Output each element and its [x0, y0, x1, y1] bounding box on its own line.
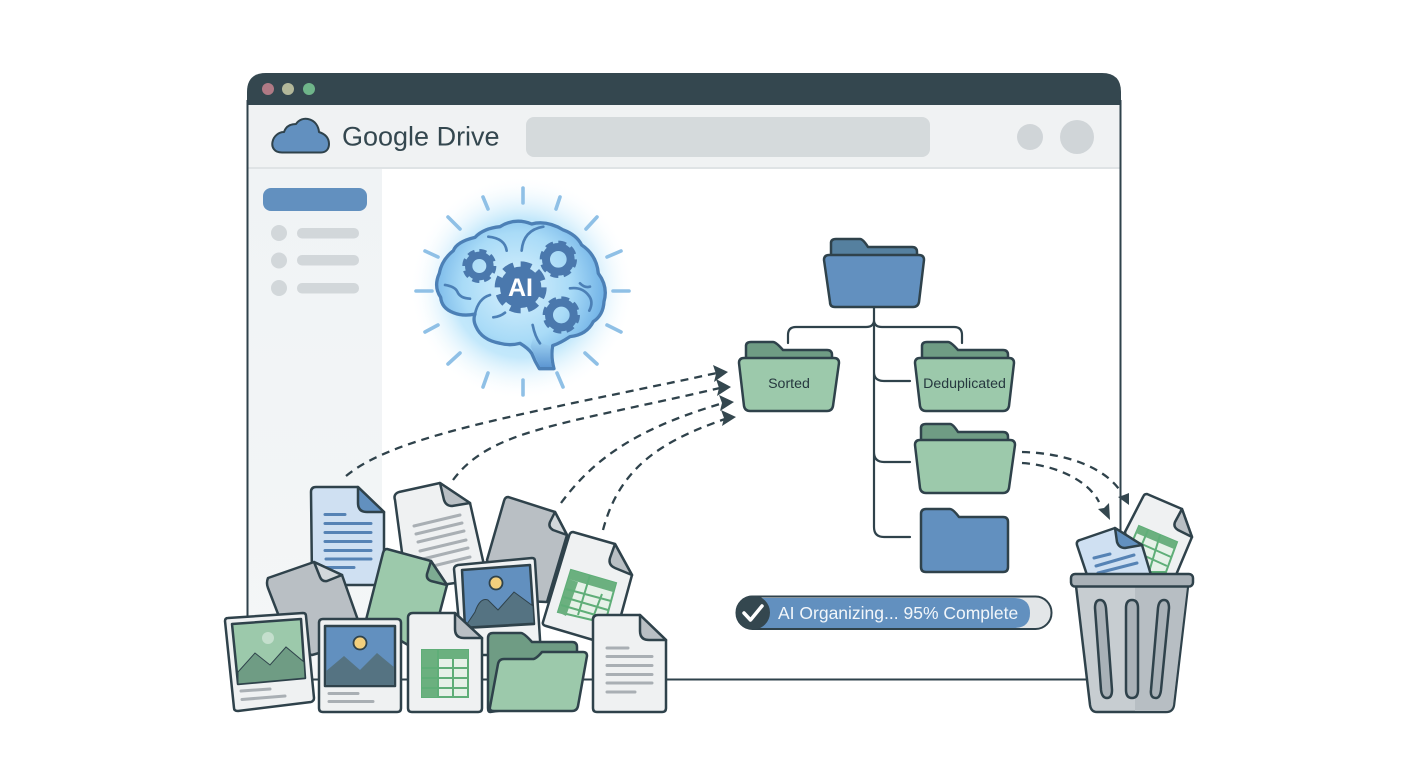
sidebar item 3	[271, 280, 359, 296]
title bar	[247, 73, 1121, 105]
progress label: AI Organizing... 95% Complete	[778, 603, 1018, 623]
header bar	[248, 105, 1120, 169]
document: gray front	[267, 562, 365, 655]
document: gray back	[487, 497, 567, 602]
root folder	[824, 239, 924, 307]
close dot	[262, 83, 274, 95]
brand name: Google Drive	[342, 122, 500, 152]
folder: unlabeled green	[915, 424, 1015, 493]
gear 1	[465, 252, 494, 280]
photo: green	[225, 613, 314, 711]
minimize dot	[282, 83, 294, 95]
slots	[1095, 600, 1112, 698]
progress bar	[736, 596, 1052, 630]
table	[558, 570, 616, 623]
sidebar item 2	[271, 252, 359, 268]
document: green	[366, 549, 447, 650]
AI gear	[498, 265, 543, 310]
folder tree connectors	[788, 307, 962, 537]
folder: Deduplicated	[915, 342, 1014, 411]
arrowheads	[713, 365, 736, 426]
dashed arrows to sorted folder	[346, 365, 736, 530]
folder: green open	[488, 633, 587, 712]
document: spreadsheet tilted	[543, 532, 632, 642]
document: blue	[311, 487, 384, 585]
brain outline	[437, 221, 605, 369]
AI brain	[410, 176, 634, 400]
check badge	[736, 596, 770, 630]
folder: Sorted	[739, 342, 839, 411]
sidebar item 1	[271, 225, 359, 241]
sun	[262, 632, 274, 644]
gear 2	[543, 244, 574, 275]
dashed arrows to trash	[1022, 452, 1129, 520]
glow	[410, 176, 634, 400]
label: Sorted	[768, 376, 810, 392]
trashed blue document	[1077, 528, 1151, 575]
sun	[490, 576, 502, 590]
can body	[1076, 586, 1188, 712]
label: Deduplicated	[923, 376, 1006, 392]
document: spreadsheet	[408, 613, 482, 712]
icon: cloud	[272, 119, 329, 152]
sun	[354, 636, 366, 650]
trashed spreadsheet	[1125, 494, 1192, 575]
sidebar	[248, 169, 382, 679]
table	[422, 650, 468, 697]
document: white tilted	[394, 483, 484, 590]
document: white	[593, 615, 666, 712]
browser window	[247, 73, 1121, 680]
sidebar button	[263, 188, 367, 211]
search bar	[526, 117, 930, 157]
settings button	[1017, 124, 1043, 150]
trash can	[1071, 494, 1193, 712]
AI label: AI	[508, 274, 533, 302]
can rim	[1071, 574, 1193, 586]
gear 3	[546, 299, 577, 331]
rays	[416, 188, 629, 395]
folder: blue flat	[921, 509, 1008, 572]
photo: blue tilted	[454, 558, 541, 655]
maximize dot	[303, 83, 315, 95]
photo: blue	[319, 619, 401, 712]
arrowheads	[1098, 493, 1129, 520]
avatar button	[1060, 120, 1094, 154]
file pile	[225, 483, 666, 712]
